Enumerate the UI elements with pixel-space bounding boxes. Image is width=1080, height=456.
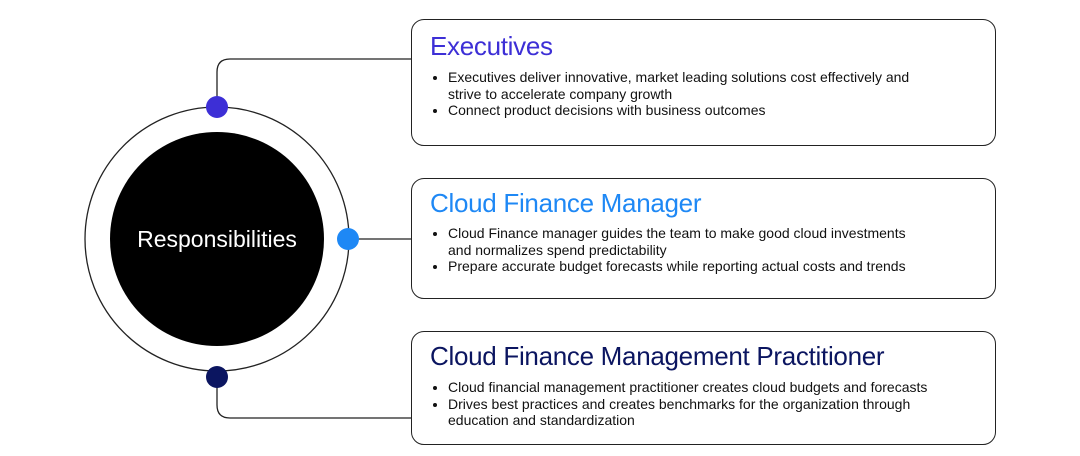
panel: executives: Executives deliver innovative, market leading solutions cost effectively and strive to accelerate company growth [448, 69, 909, 102]
panel: cloud finance manager [411, 178, 996, 299]
panel: executives: Connect product decisions with business outcomes [448, 102, 766, 118]
connectors and circle diagram: Responsibilities [137, 226, 297, 252]
panel: executives [411, 19, 996, 146]
panel: practitioner: Cloud financial management practitioner creates cloud budgets and forecasts [448, 379, 927, 395]
panel: cloud finance manager: Cloud Finance manager guides the team to make good cloud investments [448, 225, 906, 241]
panel: cloud finance manager: Prepare accurate budget forecasts while reporting actual costs and trends [448, 258, 906, 274]
panel: practitioner: Cloud Finance Management Practitioner [430, 341, 884, 371]
panel: cloud finance manager: Cloud Finance Manager [430, 188, 701, 218]
panel: cloud finance manager: and normalizes spend predictability [448, 242, 667, 258]
panel: practitioner [411, 331, 996, 445]
panel: practitioner: Drives best practices and creates benchmarks for the organization through education and standardization [448, 396, 910, 428]
panel: executives: Executives [430, 31, 553, 61]
